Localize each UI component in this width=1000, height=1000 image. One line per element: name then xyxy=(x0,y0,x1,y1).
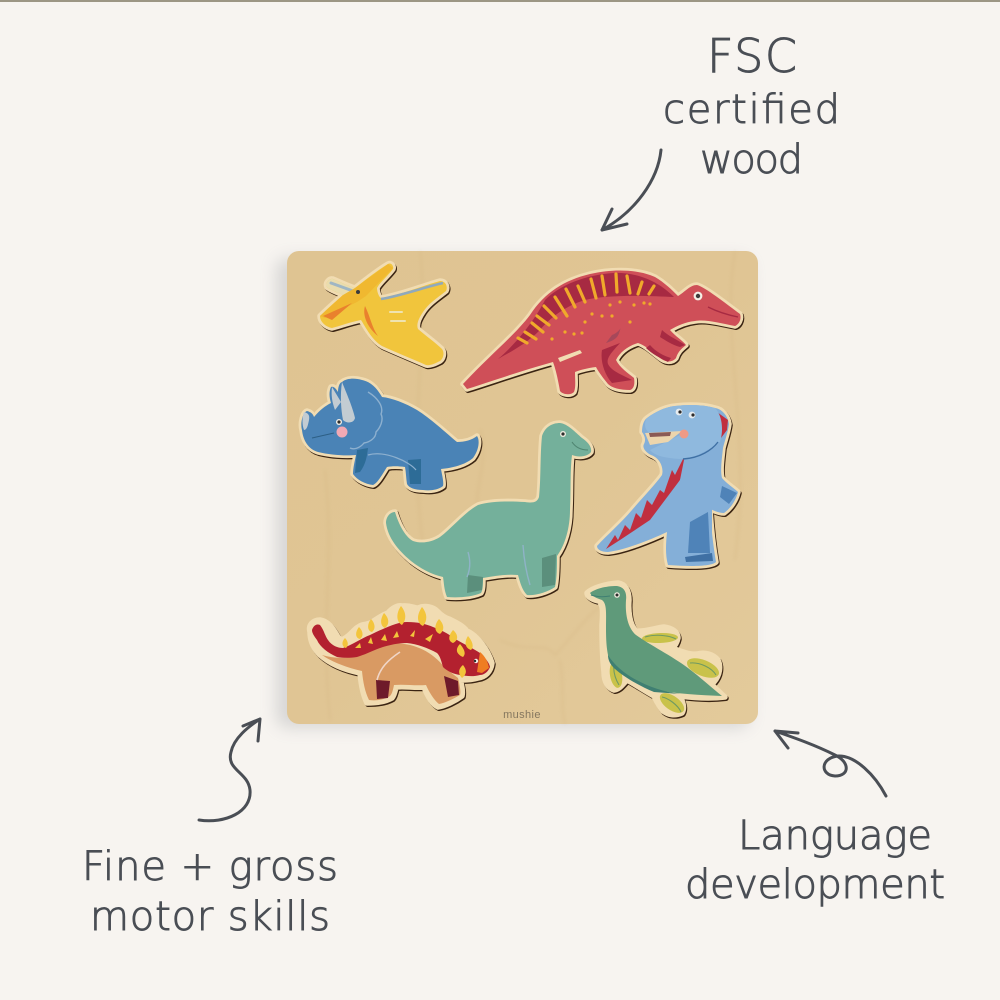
head eye and mouth xyxy=(694,292,702,300)
callout text: certified xyxy=(663,87,840,133)
arrow: language to board xyxy=(775,731,886,796)
eye and mouth xyxy=(614,592,620,598)
wood grain xyxy=(325,251,740,724)
piece: triceratops xyxy=(301,379,480,492)
leg lines xyxy=(467,545,530,585)
callout: FSC certified wood xyxy=(602,29,840,230)
left wing pale xyxy=(326,279,355,296)
callout text xyxy=(82,844,338,940)
cheek stripe xyxy=(364,306,378,336)
wing edge xyxy=(381,283,443,299)
piece: plesiosaur xyxy=(587,583,726,717)
piece: brontosaurus xyxy=(386,423,592,599)
horns xyxy=(302,382,355,430)
callout: Fine and gross motor skills xyxy=(82,719,338,940)
piece: spinosaurus xyxy=(463,270,742,396)
callout text xyxy=(663,29,840,183)
legs xyxy=(376,676,459,699)
cheek and eye xyxy=(336,426,348,438)
piece: pterodactyl xyxy=(320,263,448,366)
piece: stegosaurus xyxy=(310,606,493,708)
mouth and teeth xyxy=(645,431,682,445)
neck line xyxy=(683,442,718,459)
board base xyxy=(287,251,758,724)
head xyxy=(645,405,722,459)
far legs xyxy=(467,554,556,593)
callout text: Language xyxy=(738,813,932,859)
frill line xyxy=(350,392,382,449)
piece: t-rex xyxy=(597,405,739,567)
sail stripes xyxy=(518,274,654,343)
back spikes xyxy=(355,630,433,648)
sail xyxy=(498,273,674,359)
callout text: development xyxy=(685,862,945,908)
board shadow xyxy=(276,258,750,728)
top border strip xyxy=(0,0,1000,2)
back spots xyxy=(550,300,652,341)
callout text xyxy=(685,813,945,908)
arrow: FSC to board xyxy=(602,150,661,230)
belly xyxy=(322,644,460,704)
back spikes xyxy=(606,455,685,549)
callout text: Fine + gross xyxy=(82,844,338,890)
callout: Language development xyxy=(685,731,945,908)
far leg and feet xyxy=(688,512,710,553)
callout text: wood xyxy=(700,137,803,183)
red back xyxy=(312,622,490,676)
fins xyxy=(608,632,722,717)
callout text: motor skills xyxy=(90,894,330,940)
arm highlight xyxy=(558,350,582,362)
snout and eye xyxy=(477,652,489,673)
body xyxy=(590,586,722,696)
brand mark: mushie xyxy=(503,709,541,721)
far legs xyxy=(602,330,685,383)
arrow: motor skills to board xyxy=(199,719,260,821)
wooden puzzle board xyxy=(276,251,758,728)
callout text: FSC xyxy=(707,29,797,83)
head crest beak xyxy=(320,264,393,318)
eyes xyxy=(676,409,682,415)
eye and mouth xyxy=(560,431,566,437)
belly shade xyxy=(608,655,680,694)
dorsal plates xyxy=(342,606,473,678)
legs shading xyxy=(355,448,421,484)
